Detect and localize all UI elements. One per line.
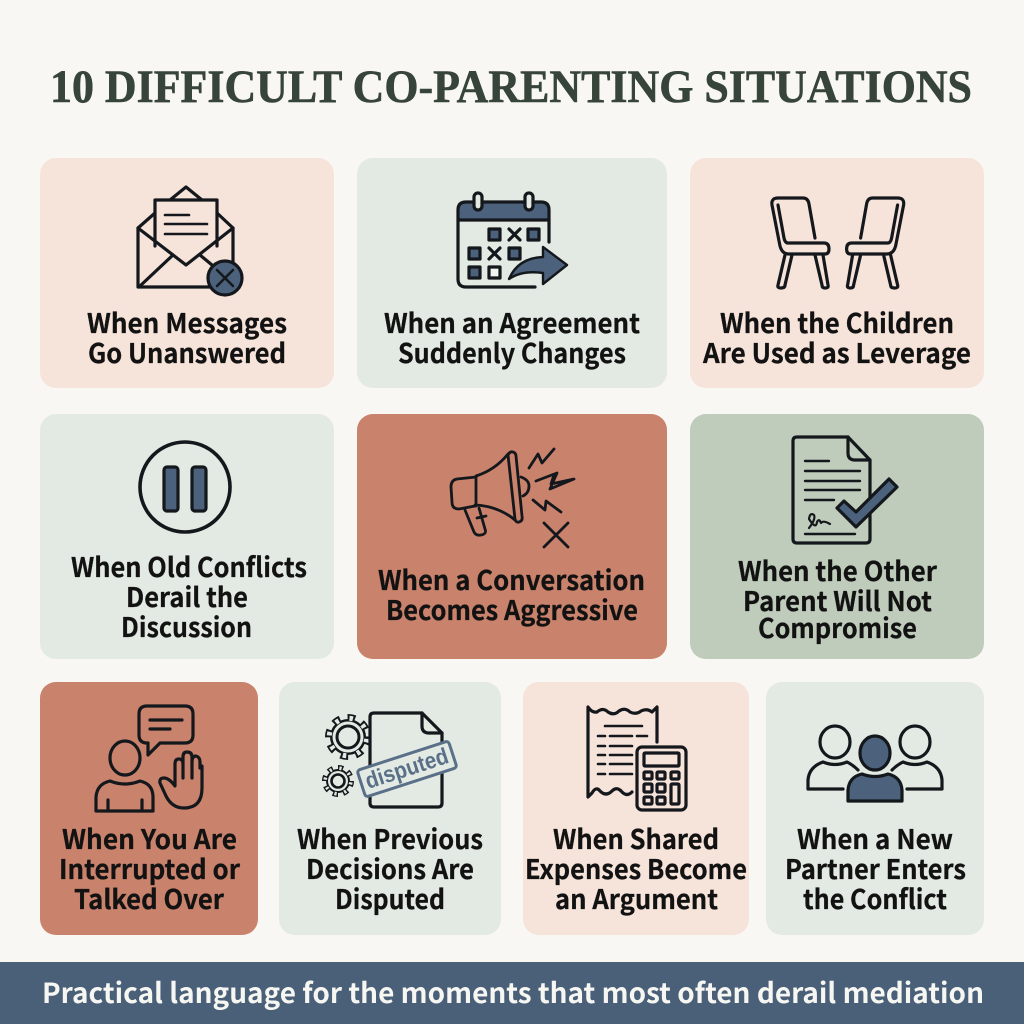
bottom banner — [0, 962, 1024, 1024]
label — [59, 818, 240, 917]
label: an Argument — [555, 878, 718, 917]
label — [378, 559, 645, 628]
label: Discussion — [121, 606, 252, 645]
icon: calendar with arrow — [458, 193, 567, 287]
label: Partner Enters — [785, 848, 966, 887]
document — [370, 713, 442, 807]
icon: envelope with x badge — [138, 187, 242, 295]
label: Decisions Are — [306, 848, 474, 887]
label — [87, 302, 287, 371]
label — [738, 550, 937, 646]
label: Interrupted or — [59, 848, 240, 887]
label: Disputed — [335, 878, 445, 917]
label: Suddenly Changes — [398, 332, 626, 371]
banner text: Practical language for the moments that most often derail mediation — [42, 972, 984, 1012]
panel: messages go unanswered — [40, 158, 334, 388]
label: When Old Conflicts — [71, 546, 307, 585]
icon: signed document with check — [793, 437, 897, 543]
label: When a New — [797, 818, 953, 857]
label: Talked Over — [74, 878, 224, 917]
label: When a Conversation — [378, 559, 645, 598]
panel: old conflicts derail — [40, 414, 334, 659]
label: When Previous — [297, 818, 483, 857]
label: When Messages — [87, 302, 287, 341]
label: When an Agreement — [384, 302, 640, 341]
icon: receipt and calculator — [588, 707, 686, 810]
label — [71, 546, 307, 645]
large gear — [329, 718, 367, 756]
label — [297, 818, 483, 917]
label — [702, 302, 971, 371]
label: the Conflict — [803, 878, 947, 917]
icon: gears, document and disputed stamp — [325, 713, 457, 807]
panel: children used as leverage — [690, 158, 984, 388]
label: When You Are — [62, 818, 237, 857]
panel: previous decisions disputed — [279, 682, 501, 935]
label — [525, 818, 747, 917]
title: 10 DIFFICULT CO-PARENTING SITUATIONS — [50, 62, 972, 113]
panel: other parent will not compromise — [690, 414, 984, 659]
label: When Shared — [553, 818, 719, 857]
label: Go Unanswered — [88, 332, 286, 371]
label: When the Other — [738, 550, 937, 589]
label: Derail the — [126, 576, 248, 615]
label: Expenses Become — [525, 848, 747, 887]
panel: conversation becomes aggressive — [357, 414, 667, 659]
panel: shared expenses — [523, 682, 749, 935]
icon: two chairs — [772, 198, 904, 288]
icon: megaphone with sparks — [451, 449, 574, 547]
label — [384, 302, 640, 371]
label: Parent Will Not — [743, 580, 932, 619]
label: When the Children — [720, 302, 954, 341]
label: Becomes Aggressive — [386, 589, 638, 628]
label: Are Used as Leverage — [702, 332, 971, 371]
stamp: disputed — [362, 742, 452, 794]
icon: three people — [808, 726, 942, 801]
label — [785, 818, 966, 917]
panel: agreement suddenly changes — [357, 158, 667, 388]
panel: new partner enters — [766, 682, 984, 935]
icon: pause button — [140, 442, 230, 532]
small gear — [325, 768, 351, 794]
icon: person, speech bubble and raised hand — [96, 706, 202, 811]
label: Compromise — [758, 607, 917, 646]
panel: interrupted or talked over — [40, 682, 258, 935]
